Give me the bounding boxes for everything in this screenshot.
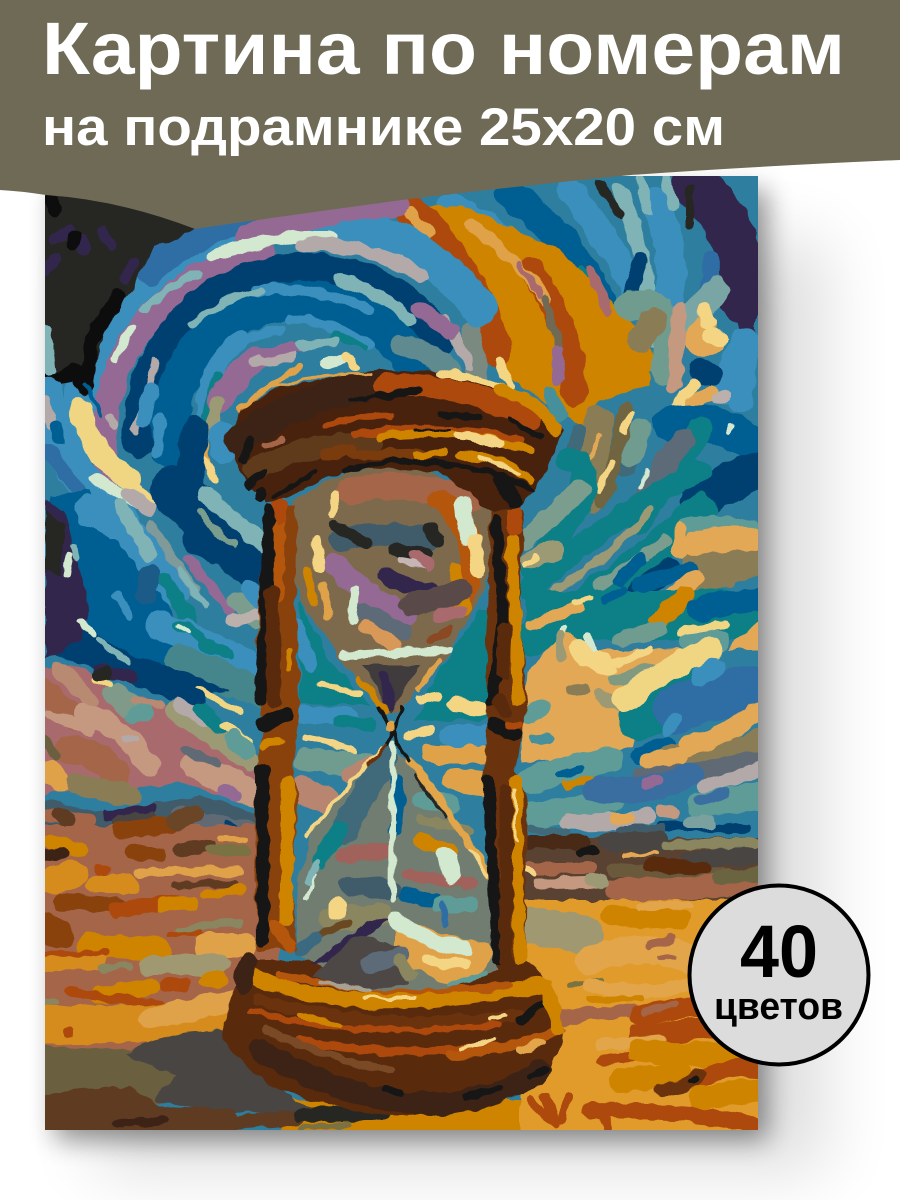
badge label: цветов [714,986,843,1028]
left streaks [45,385,265,712]
left pink mountains [30,665,262,810]
right horizon [520,828,770,905]
right mid upper [564,305,760,520]
upper-right streaks [450,178,748,390]
hourglass neck [368,708,410,765]
painting: hourglass in a swirling sky [30,160,780,1150]
dark top-left corner [45,194,194,396]
badge: 40 colours [690,886,868,1064]
glass lower bulb [297,745,497,990]
right mid teal streaks [525,460,760,640]
ground [30,814,780,1140]
right column [483,510,527,960]
hourglass top cap [227,370,563,513]
dusky blue hills [45,795,256,828]
swirl arcs [78,203,478,510]
orange sweep [395,203,650,430]
glass background through neck [297,600,495,800]
sky base [30,160,780,1150]
ground shadow left [30,1031,385,1140]
hourglass base [223,960,563,1115]
canvas drop shadow [55,190,825,1170]
badge number: 40 [740,910,818,993]
heading banner [0,0,900,229]
left column [254,505,300,950]
title line 1: Картина по номерам [42,7,845,90]
title line 2: на подрамнике 25х20 см [42,98,725,157]
glass upper bulb [288,465,497,712]
right clouds [520,530,770,830]
